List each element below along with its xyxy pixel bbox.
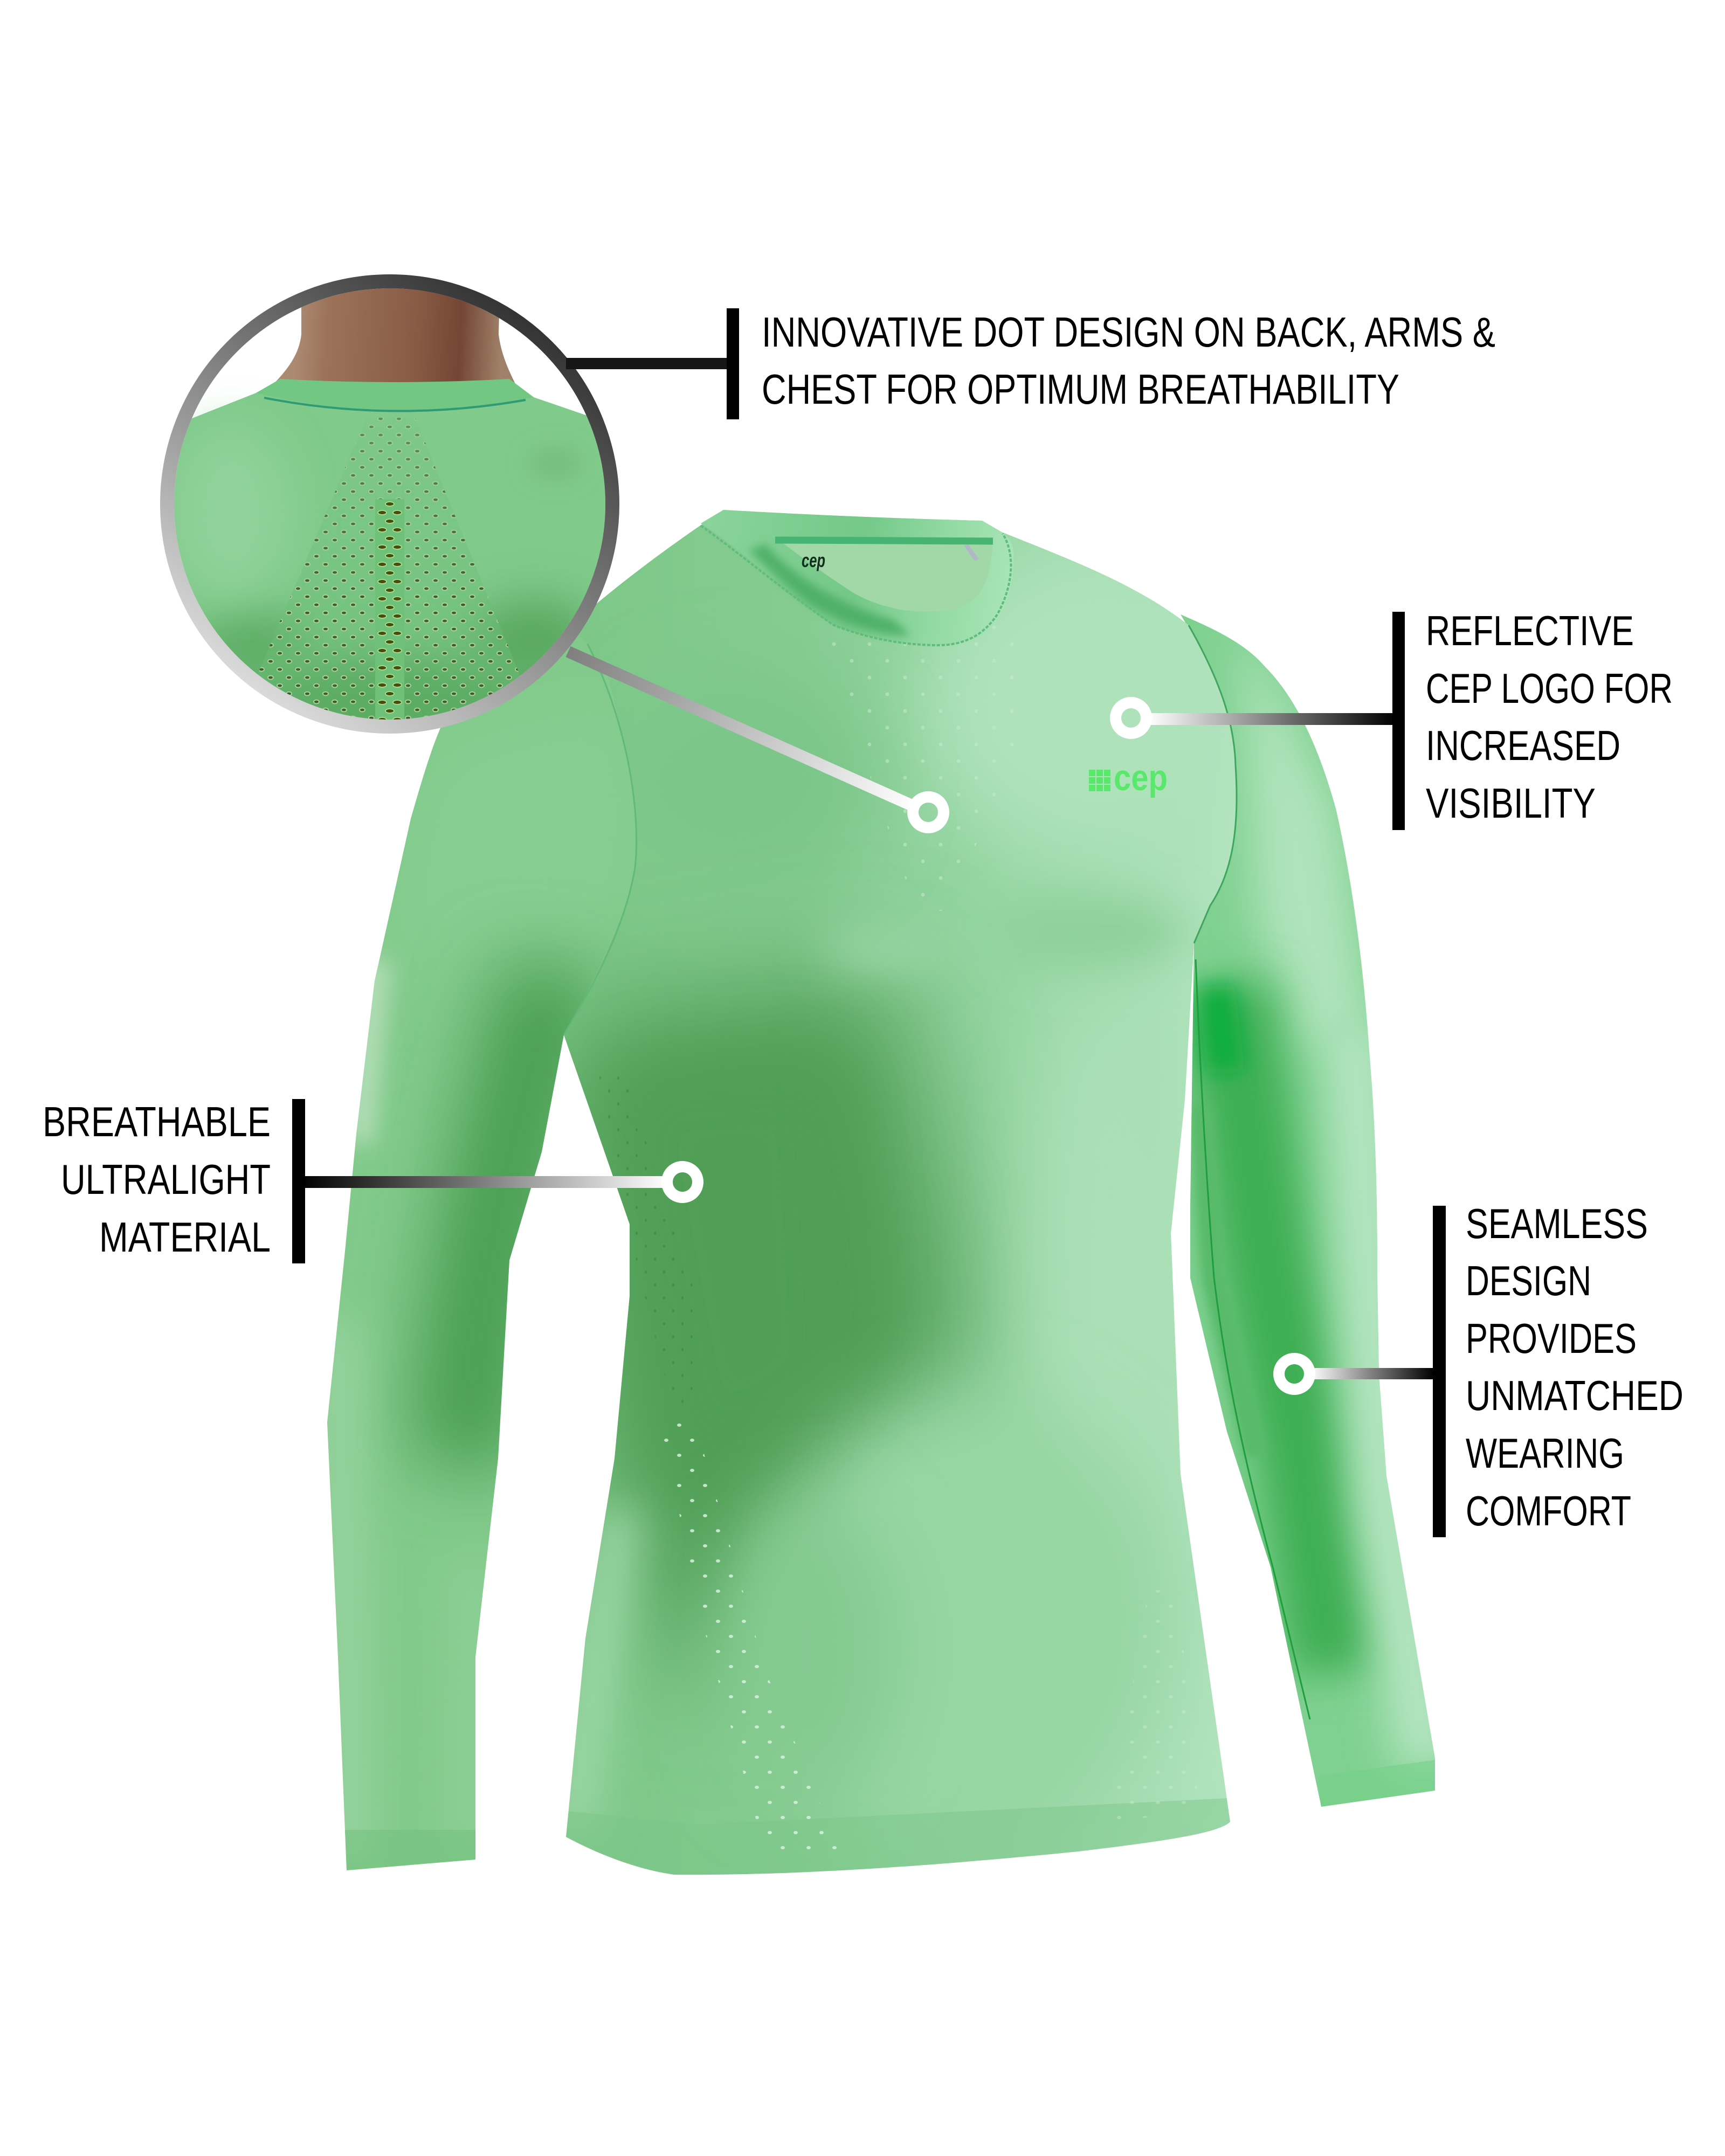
marker xyxy=(1116,703,1146,733)
connector xyxy=(1148,713,1396,725)
collar band xyxy=(701,510,1013,645)
callout: seamless design xyxy=(1279,1200,1683,1537)
text: REFLECTIVE xyxy=(1426,607,1634,654)
dot pattern: left side lower xyxy=(660,1423,841,1854)
circle ring xyxy=(167,281,612,727)
text: BREATHABLE xyxy=(43,1098,271,1145)
callout: breathable material: MATERIAL xyxy=(99,1213,271,1261)
left sleeve xyxy=(327,610,636,1870)
collar stitch xyxy=(701,526,1011,645)
inner label tab xyxy=(964,544,979,561)
collar xyxy=(701,510,1013,645)
callout: breathable material: ULTRALIGHT xyxy=(61,1156,271,1203)
bar xyxy=(292,1099,305,1263)
marker xyxy=(667,1166,698,1198)
central vent column xyxy=(375,499,404,725)
callout: breathable material xyxy=(43,1098,698,1263)
collar rib xyxy=(256,379,534,411)
bar xyxy=(727,308,739,419)
callout: top dot design xyxy=(566,308,1495,419)
connector xyxy=(299,1176,668,1188)
logo wordmark: cep xyxy=(1114,757,1168,798)
callout: seamless design: WEARING xyxy=(1466,1429,1624,1477)
zoom circle: back detail xyxy=(162,270,625,787)
connector line to zoom circle xyxy=(568,652,916,807)
connector xyxy=(1310,1368,1437,1379)
circle interior xyxy=(162,270,625,787)
callout: top dot design: CHEST FOR OPTIMUM BREATHABILITY xyxy=(762,365,1399,413)
inner cep print: cep xyxy=(802,549,825,571)
callout: seamless design: DESIGN xyxy=(1466,1257,1591,1304)
marker xyxy=(1279,1358,1310,1390)
callout: reflective logo: INCREASED xyxy=(1426,722,1620,769)
logo grid xyxy=(1089,770,1110,791)
inside back panel xyxy=(775,537,993,612)
right sleeve seam xyxy=(1196,959,1310,1719)
connector xyxy=(566,358,730,369)
right raglan seam xyxy=(1189,625,1237,943)
callout: seamless design: COMFORT xyxy=(1466,1487,1631,1535)
bar xyxy=(1392,612,1405,830)
text: SEAMLESS xyxy=(1466,1200,1648,1247)
back neck tape xyxy=(775,540,993,541)
shirt: long-sleeve compression top xyxy=(296,485,1461,1913)
marker: chest dots xyxy=(913,797,943,828)
collar front shadow xyxy=(749,544,911,636)
reflective cep logo xyxy=(1089,757,1168,798)
bar xyxy=(1433,1206,1446,1537)
callout: seamless design: PROVIDES xyxy=(1466,1315,1637,1362)
text: INNOVATIVE DOT DESIGN ON BACK, ARMS & xyxy=(762,308,1495,356)
callout: reflective logo: VISIBILITY xyxy=(1426,779,1596,827)
dot pattern: chest xyxy=(819,620,1013,911)
right sleeve xyxy=(1181,614,1435,1807)
left raglan seam xyxy=(564,644,637,1035)
callout: seamless design: UNMATCHED xyxy=(1466,1372,1683,1419)
fabric back xyxy=(162,380,625,744)
neck xyxy=(270,270,518,388)
dot pattern: left side upper xyxy=(598,1073,695,1412)
mesh triangle xyxy=(237,418,539,722)
callout: reflective logo xyxy=(1116,607,1673,830)
dot pattern: right side lower xyxy=(1110,1590,1199,1822)
torso xyxy=(539,485,1267,1897)
